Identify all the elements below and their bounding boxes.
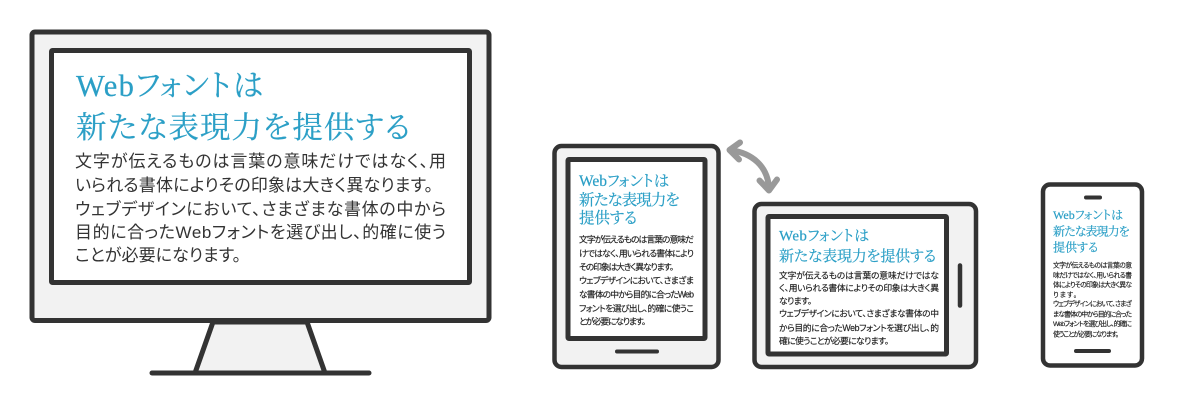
monitor heading: Webフォントは <box>76 69 263 103</box>
monitor stand <box>152 322 369 373</box>
tablet heading <box>579 173 680 227</box>
device: landscape tablet <box>754 204 976 367</box>
monitor body text <box>75 152 446 265</box>
landscape tablet heading: 新たな表現力を提供する <box>779 247 936 265</box>
phone body text <box>1053 260 1132 338</box>
phone body <box>1043 184 1142 366</box>
monitor body <box>32 32 489 320</box>
phone heading: 提供する <box>1053 240 1098 254</box>
landscape tablet body text: く、用いられる書体によりその印象は大きく異 <box>779 282 939 293</box>
phone body text: 文字が伝えるものは言葉の意 <box>1053 260 1132 270</box>
monitor body text: ウェブデザインにおいて、さまざまな書体の中から <box>75 199 446 219</box>
monitor body text: 文字が伝えるものは言葉の意味だけではなく、用 <box>75 152 446 171</box>
tablet heading: 提供する <box>579 208 637 227</box>
phone home bar <box>1076 349 1109 353</box>
monitor body text: いられる書体によりその印象は大きく異なります。 <box>75 176 433 195</box>
landscape tablet body text: 確に使うことが必要になります。 <box>779 335 889 346</box>
tablet heading: 新たな表現力を <box>579 191 680 209</box>
landscape tablet heading: Webフォントは <box>779 228 869 244</box>
tablet body text: その印象は大きく異なります。 <box>579 261 674 272</box>
tablet body text: フォントを選び出し、的確に使うこ <box>579 302 694 314</box>
tablet body text: けではなく、用いられる書体により <box>579 248 694 258</box>
tablet body <box>554 146 718 367</box>
monitor heading <box>76 69 410 145</box>
tablet body text <box>579 234 694 326</box>
monitor screen <box>52 50 470 282</box>
monitor body text: 目的に合ったWebフォントを選び出し、的確に使う <box>75 222 446 242</box>
landscape tablet body text: ウェブデザインにおいて、さまざまな書体の中 <box>779 308 939 318</box>
tablet body text: な書体の中から目的に合ったWeb <box>579 288 694 300</box>
tablet screen <box>568 160 705 338</box>
landscape tablet body text <box>779 270 939 346</box>
tablet home bar <box>617 350 657 354</box>
phone heading: Webフォントは <box>1053 208 1123 222</box>
monitor heading: 新たな表現力を提供する <box>76 111 410 145</box>
phone speaker <box>1086 196 1100 200</box>
phone body text: まな書体の中から目的に合った <box>1053 310 1132 318</box>
tablet body text: とが必要になります。 <box>579 316 646 326</box>
device: desktop monitor <box>32 32 489 373</box>
landscape tablet body <box>754 204 976 367</box>
phone body text: 体によりその印象は大きく異な <box>1053 280 1132 289</box>
landscape tablet home bar <box>958 266 962 306</box>
landscape tablet body text: から目的に合ったWebフォントを選び出し、的 <box>779 322 939 333</box>
phone heading: 新たな表現力を <box>1053 224 1130 238</box>
icon: rotate arrow <box>730 142 777 190</box>
landscape tablet screen <box>768 216 946 354</box>
phone body text: ウェブデザインにおいて、さまざ <box>1053 299 1132 308</box>
device: smartphone <box>1043 184 1142 366</box>
phone body text: ります。 <box>1053 291 1077 299</box>
landscape tablet body text: なります。 <box>779 296 812 306</box>
phone body text: Webフォントを選び出し、的確に <box>1053 319 1132 328</box>
monitor body text: ことが必要になります。 <box>75 246 241 265</box>
landscape tablet body text: 文字が伝えるものは言葉の意味だけではな <box>779 270 939 280</box>
phone body text: 使うことが必要になります。 <box>1053 330 1119 338</box>
landscape tablet heading <box>779 228 936 265</box>
tablet body text: 文字が伝えるものは言葉の意味だ <box>579 234 694 244</box>
tablet body text: ウェブデザインにおいて、さまざま <box>579 274 694 286</box>
device: portrait tablet <box>554 146 718 367</box>
phone body text: 味だけではなく、用いられる書 <box>1053 270 1132 280</box>
tablet heading: Webフォントは <box>579 173 669 190</box>
phone heading <box>1053 208 1130 254</box>
